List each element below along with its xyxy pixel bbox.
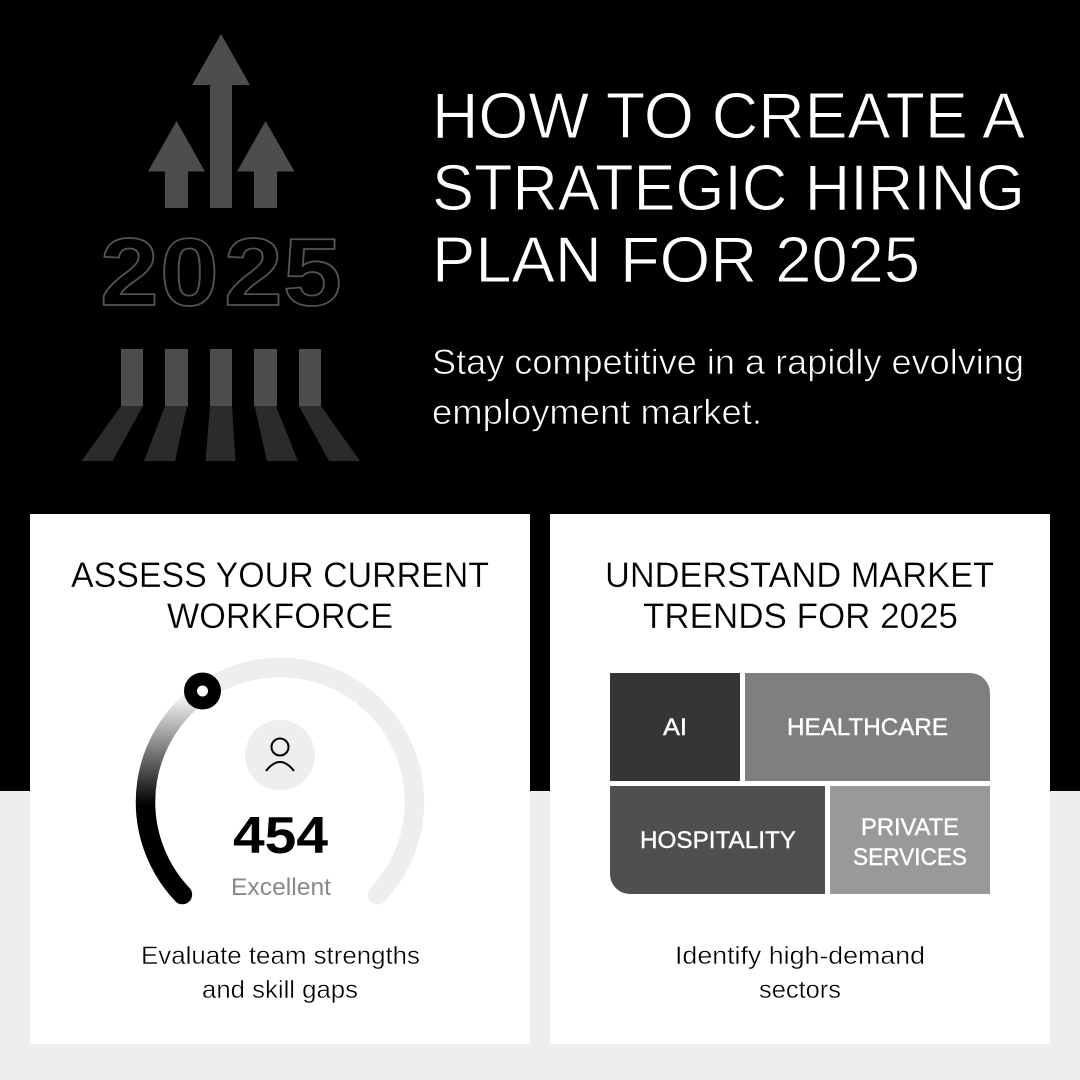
title (432, 79, 1026, 296)
heading: assess your current workforce (71, 556, 489, 636)
subtitle: employment market. (432, 393, 762, 432)
title: PLAN FOR 2025 (432, 223, 920, 296)
heading: assess your current workforce: WORKFORCE (167, 597, 393, 636)
icon: five bars with shadows (82, 349, 360, 461)
cell: private services: SERVICES (853, 844, 967, 871)
description: identify sectors (675, 942, 925, 1004)
description: identify sectors: Identify high-demand (675, 942, 925, 970)
heading: assess your current workforce: ASSESS YOUR CURRENT (71, 556, 489, 595)
icon: person in circle (245, 720, 315, 790)
gauge chart (146, 668, 414, 895)
score label: Excellent (231, 874, 331, 901)
icon: three upward arrows (148, 34, 294, 208)
cell: AI (610, 673, 740, 781)
heading: understand market trends: UNDERSTAND MARKET (605, 556, 994, 595)
treemap chart (610, 673, 990, 894)
outlined year 2025: 2025 (100, 219, 342, 326)
heading: understand market trends: TRENDS FOR 2025 (643, 597, 958, 636)
panel: assess workforce (30, 514, 530, 1044)
cell: AI: AI (663, 714, 687, 741)
cell: healthcare (745, 673, 990, 781)
cell: healthcare: HEALTHCARE (787, 714, 948, 741)
subtitle (432, 343, 1024, 432)
description: evaluate team (141, 942, 420, 1004)
title: HOW TO CREATE A (432, 79, 1026, 152)
description: evaluate team: and skill gaps (202, 976, 358, 1004)
panel: market trends (550, 514, 1050, 1044)
subtitle: Stay competitive in a rapidly evolving (432, 343, 1024, 382)
title: STRATEGIC HIRING (432, 151, 1025, 224)
heading: understand market trends (605, 556, 994, 636)
description: identify sectors: sectors (759, 976, 841, 1004)
cell: hospitality (610, 786, 825, 894)
score 454: 454 (233, 807, 328, 865)
cell: hospitality: HOSPITALITY (640, 827, 796, 854)
cell: private services: PRIVATE (861, 814, 959, 841)
cell: private services (830, 786, 990, 894)
description: evaluate team: Evaluate team strengths (141, 942, 420, 970)
